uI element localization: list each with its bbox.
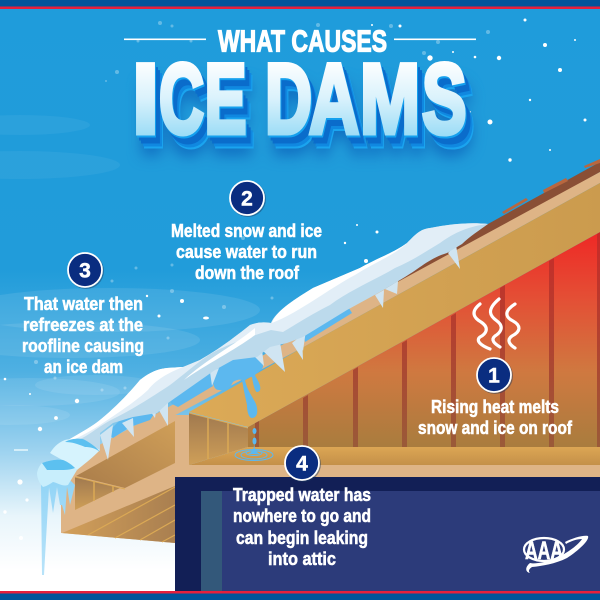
step 4 text: Trapped water has xyxy=(233,485,371,505)
title: ice dams: M xyxy=(360,43,420,154)
step 3 text xyxy=(22,294,144,377)
step 2 text: Melted snow and ice xyxy=(171,221,322,241)
title: ice dams: D xyxy=(265,43,312,154)
title: what causes: WHAT CAUSES xyxy=(218,24,387,58)
step 1 text: snow and ice on roof xyxy=(418,418,573,438)
AAA logo: AAA xyxy=(525,537,563,565)
bottom band xyxy=(0,591,600,600)
step 1 text: Rising heat melts xyxy=(431,397,559,417)
step 3 text: roofline causing xyxy=(22,336,144,356)
step 3 badge xyxy=(68,253,104,289)
faint snowflakes xyxy=(34,21,490,392)
step 4 badge xyxy=(285,446,321,482)
step 4 text: nowhere to go and xyxy=(233,506,371,526)
AAA logo xyxy=(524,536,588,573)
step 3 text: That water then xyxy=(24,294,143,314)
attic left panel xyxy=(189,413,248,465)
title: ice dams: E xyxy=(204,43,246,154)
step 2 text: down the roof xyxy=(195,263,300,283)
step 1 text xyxy=(418,397,573,438)
step 2 badge: 2 xyxy=(241,188,253,210)
roofline ice dam xyxy=(37,439,100,575)
step 4 badge: 4 xyxy=(296,452,308,476)
step 3 text: an ice dam xyxy=(44,357,123,377)
clouds xyxy=(0,115,260,445)
title: ice dams: S xyxy=(422,43,466,154)
title: ice dams xyxy=(132,43,466,154)
step 1 badge xyxy=(477,358,513,394)
ice under snow xyxy=(107,305,352,444)
step 2 badge xyxy=(230,181,266,217)
title: ice dams: A xyxy=(309,43,359,154)
attic floor xyxy=(175,447,600,477)
snow on roof xyxy=(50,223,488,460)
step 1 badge: 1 xyxy=(488,364,500,388)
step 4 text xyxy=(233,485,371,569)
top band xyxy=(0,0,600,9)
step 2 text: cause water to run xyxy=(176,242,317,262)
step 3 badge: 3 xyxy=(79,260,91,282)
title: ice dams: C xyxy=(159,43,204,154)
step 3 text: refreezes at the xyxy=(23,315,143,335)
attic wall with heat gradient xyxy=(248,232,600,447)
step 4 text: into attic xyxy=(268,549,336,569)
step 4 text: can begin leaking xyxy=(236,528,368,548)
step 2 text xyxy=(171,221,322,283)
heat waves icon xyxy=(474,299,519,349)
basement panel xyxy=(175,477,600,591)
roof structure xyxy=(90,159,600,455)
water ripple xyxy=(235,444,273,460)
title: ice dams: I xyxy=(132,43,159,154)
left overhang structure xyxy=(61,415,189,543)
